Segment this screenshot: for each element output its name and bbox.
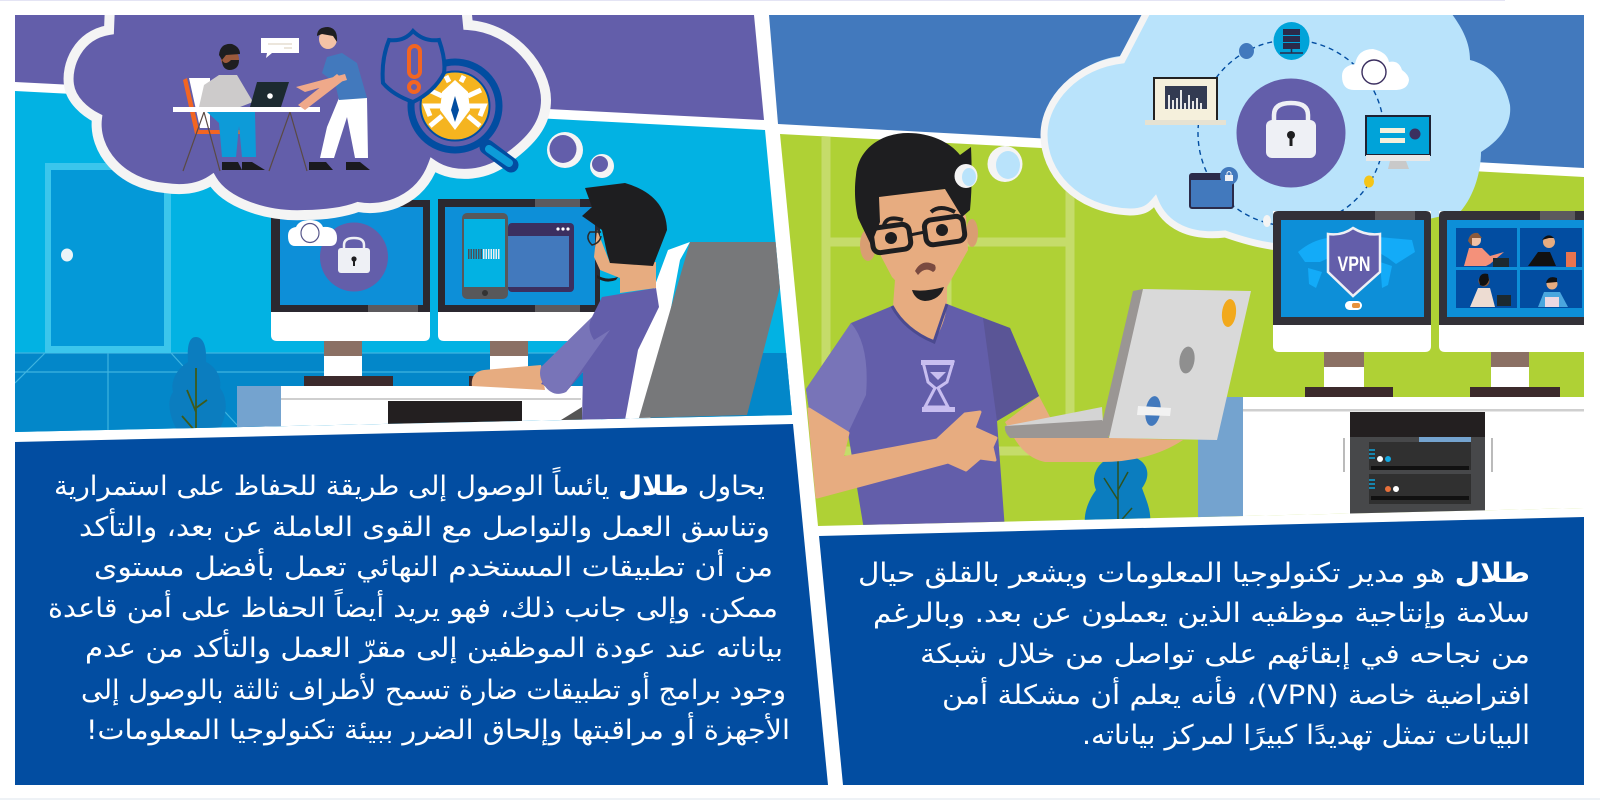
paragraph: right: من نجاحه في إبقائهم على تواصل من خلال شبكة	[920, 639, 1530, 670]
manager holding laptop	[806, 133, 1251, 530]
icon: hourglass	[921, 360, 955, 412]
chair	[623, 242, 780, 420]
panel: right text	[819, 517, 1584, 785]
left monitor	[271, 200, 430, 387]
icon: server	[1274, 22, 1310, 60]
icon: node dot	[1239, 43, 1254, 59]
green room scene	[775, 130, 1590, 530]
thought bubbles	[547, 132, 614, 178]
right monitor stand	[1470, 352, 1560, 398]
neck	[893, 280, 947, 340]
paragraph: right: افتراضية خاصة (VPN)، فأنه يعلم أن مشكلة أمن	[942, 675, 1530, 711]
paragraph: left: وتناسق العمل والتواصل مع القوى العاملة عن بعد، والتأكد	[79, 507, 770, 543]
thought bubbles	[954, 146, 1022, 188]
glasses	[871, 208, 966, 254]
desk with laptop	[173, 82, 320, 171]
icon: cloud sync	[288, 220, 337, 246]
seated colleague	[183, 44, 265, 170]
VPN shield: VPN	[1338, 253, 1370, 276]
video tiles	[1456, 228, 1582, 308]
paragraph: left: يحاول طلال يائساً الوصول إلى طريقة للحفاظ على استمرارية	[54, 466, 765, 502]
blue back wall	[769, 15, 1584, 168]
paragraph: left: بياناته عند عودة الموظفين إلى مقرّ العمل والتأكد من عدم	[85, 628, 783, 664]
paragraph: right	[858, 558, 1530, 751]
thought cloud: bug-hunting and support	[69, 5, 546, 215]
desk and side block	[1198, 397, 1588, 522]
speech bubble	[261, 38, 299, 58]
paragraph: left: ممكن. وإلى جانب ذلك، فهو يريد أيضاً الحفاظ على أمن قاعدة	[48, 588, 778, 624]
VPN monitor	[1273, 211, 1431, 352]
standing colleague	[296, 27, 370, 170]
paragraph: left	[48, 466, 790, 746]
paragraph: right: البيانات تمثل تهديدًا كبيرًا لمركز بياناته.	[1082, 720, 1530, 751]
window frame	[826, 137, 1070, 460]
toggle	[1345, 301, 1362, 310]
icon: locked window	[1190, 167, 1238, 208]
right monitor	[438, 199, 600, 387]
icon: warning shield	[383, 31, 444, 102]
icon: plant	[169, 337, 226, 432]
office room scene	[15, 91, 795, 438]
arm under laptop	[1005, 396, 1183, 462]
hand	[809, 409, 996, 497]
desk	[237, 386, 601, 428]
dashed network ring	[1198, 40, 1384, 226]
icon: login monitor	[1366, 116, 1430, 169]
icon: magnifier with bug	[411, 62, 511, 165]
left monitor stand	[1305, 352, 1393, 398]
purple back wall	[15, 15, 764, 120]
door	[45, 163, 171, 353]
paragraph: left: وجود برامج أو تطبيقات ضارة تسمح لأطراف ثالثة بالوصول إلى	[81, 671, 786, 706]
head	[855, 133, 978, 301]
icon: cloud sync	[1342, 49, 1409, 90]
text panel background	[15, 424, 828, 785]
head	[594, 230, 656, 293]
shirt	[541, 288, 659, 420]
paragraph: right: طلال هو مدير تكنولوجيا المعلومات ويشعر بالقلق حيال	[858, 558, 1530, 589]
icon: plant	[1084, 458, 1150, 520]
panel: right illustration, IT manager with laptop	[769, 10, 1590, 530]
paragraph: left: الأجهزة أو مراقبتها وإلحاق الضرر ببيئة تكنولوجيا المعلومات!	[86, 711, 790, 746]
floor	[15, 353, 795, 438]
icon: central padlock	[1236, 78, 1346, 188]
text panel background	[819, 517, 1584, 785]
world map	[1298, 237, 1415, 288]
panel: left illustration, worried manager at his desk	[15, 5, 795, 438]
video call monitor	[1439, 211, 1584, 352]
icon: laptop with chart	[1145, 78, 1226, 125]
icon: yellow node	[1364, 176, 1374, 188]
panel: left text	[15, 424, 828, 785]
shirt	[806, 304, 1039, 530]
icon: white node	[1263, 215, 1271, 227]
icon: window	[508, 223, 574, 292]
icon: lock in purple circle	[320, 222, 388, 292]
arm	[472, 365, 545, 390]
paragraph: right: سلامة وإنتاجية موظفيه الذين يعملون عن بعد. وبالرغم	[873, 598, 1530, 629]
paragraph: left: من أن تطبيقات المستخدم النهائي تعمل بأفضل مستوى	[94, 547, 773, 583]
manager seen from behind	[472, 183, 667, 420]
server rack	[1344, 412, 1492, 514]
thought cloud: secure network	[1042, 10, 1510, 250]
icon: phone	[462, 213, 508, 299]
VPN shield	[1328, 228, 1380, 296]
icon: laptop	[1005, 289, 1251, 440]
